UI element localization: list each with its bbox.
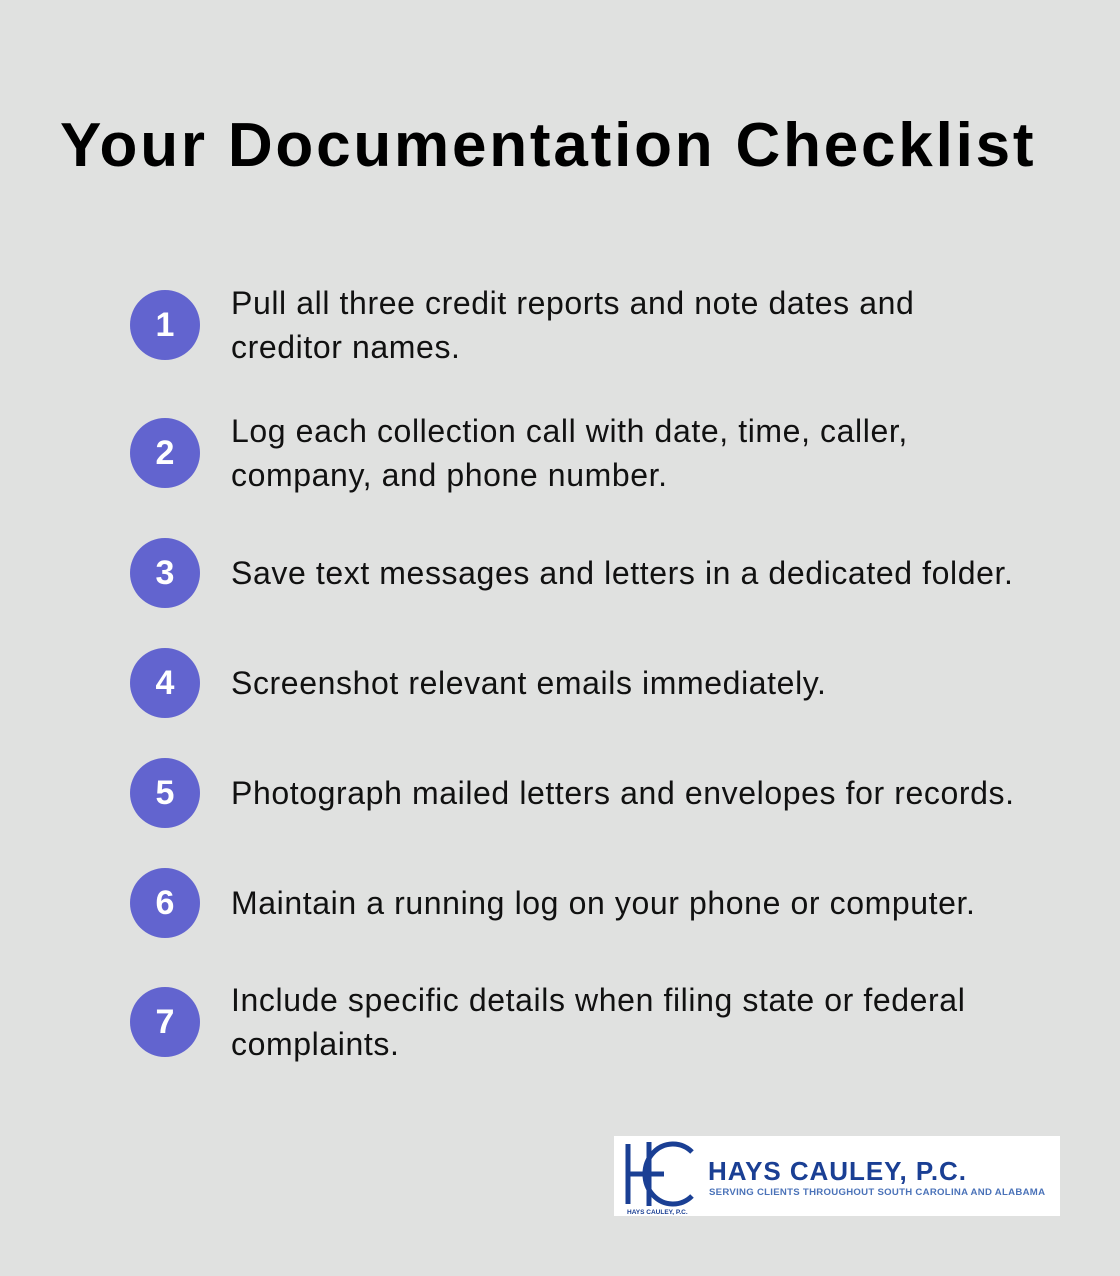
item 2: company, and phone number. [231, 457, 668, 493]
item 3: Save text messages and letters in a dedicated folder. [231, 555, 1013, 591]
item 2: Log each collection call with date, time, caller, [231, 413, 908, 449]
item 7: Include specific details when filing state or federal [231, 982, 965, 1018]
item 5 [130, 758, 1015, 828]
logo: HAYS CAULEY, P.C. [627, 1209, 688, 1216]
item 1: creditor names. [231, 329, 461, 365]
item 6: 6 [156, 884, 174, 922]
item 3: 3 [156, 554, 174, 592]
item 6 [130, 868, 976, 938]
item 5: 5 [156, 774, 174, 812]
item 4 [130, 648, 826, 718]
logo: HAYS CAULEY, P.C. [708, 1156, 966, 1186]
item 7: 7 [156, 1003, 174, 1041]
item 1 [130, 285, 914, 365]
item 6: Maintain a running log on your phone or computer. [231, 885, 976, 921]
item 5: Photograph mailed letters and envelopes for records. [231, 775, 1015, 811]
logo [614, 1136, 1060, 1216]
item 3 [130, 538, 1013, 608]
item 7: complaints. [231, 1026, 399, 1062]
logo: SERVING CLIENTS THROUGHOUT SOUTH CAROLINA AND ALABAMA [709, 1187, 1045, 1198]
item 1: 1 [156, 306, 174, 344]
icon: HC monogram [628, 1142, 692, 1206]
item 2: 2 [156, 434, 174, 472]
item 1: Pull all three credit reports and note dates and [231, 285, 914, 321]
item 4: 4 [156, 664, 174, 702]
item 7 [130, 982, 965, 1062]
title: Your Documentation Checklist [60, 111, 1036, 180]
item 2 [130, 413, 908, 493]
item 4: Screenshot relevant emails immediately. [231, 665, 826, 701]
